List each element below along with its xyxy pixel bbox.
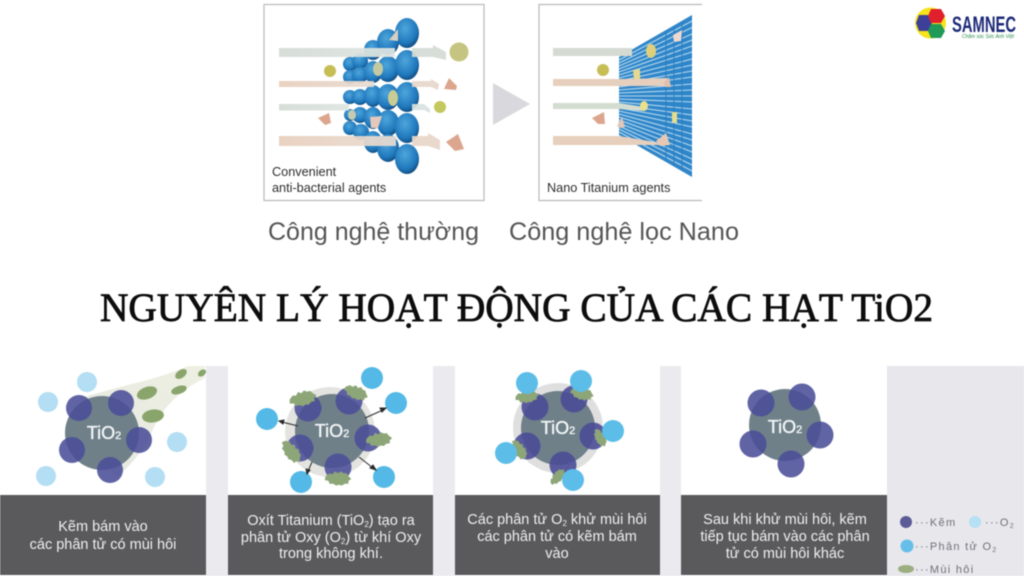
legend: zinc: ···Kẽm [915, 517, 956, 529]
step 2 caption: 2 [364, 520, 369, 529]
legend: O2 [969, 516, 1015, 530]
step 3 caption: 2 [562, 519, 567, 528]
O2 molecules [495, 370, 624, 491]
trapped particles [592, 30, 682, 146]
legend: O2 molecule: ···Phân tử O [915, 541, 992, 553]
panel: step 4: TiO2 [768, 417, 802, 437]
arrows through spheres [279, 45, 446, 150]
legend: zinc [900, 516, 956, 529]
odor plume [80, 366, 205, 478]
arrow between diagrams [493, 83, 530, 125]
step 3 caption [455, 495, 660, 575]
step 4 caption: tiếp tục bám vào các phân [700, 529, 870, 545]
odor particles [508, 385, 610, 488]
legend: O2 molecule: 2 [992, 547, 998, 554]
blocked particles among spheres [348, 29, 398, 128]
zinc particles [514, 386, 606, 478]
step 2 caption: phân tử Oxy (O [241, 530, 341, 546]
step 1 caption: các phân tử có mùi hôi [30, 537, 176, 553]
step 2 caption [228, 495, 433, 575]
filtered bands [553, 48, 667, 145]
step 1 caption: Kẽm bám vào [58, 519, 148, 535]
zinc particles [59, 390, 152, 483]
O2 particles [36, 372, 187, 487]
zinc particles [740, 384, 834, 478]
label: anti-bacterial agents [272, 181, 386, 195]
particles [318, 42, 468, 151]
title: NGUYÊN LÝ HOẠT ĐỘNG CỦA CÁC HẠT TiO2 [100, 285, 933, 330]
panel: step 3 [495, 370, 624, 491]
legend: O2: 2 [1010, 523, 1015, 530]
label: Convenient [272, 165, 337, 179]
legend: O2 molecule [900, 540, 998, 554]
legend: O2: ···O [985, 517, 1010, 529]
step 2 caption: 2 [341, 537, 346, 546]
panel: step 2: TiO2 [315, 421, 349, 441]
panel: legend column [887, 366, 1024, 576]
zinc particles [286, 388, 382, 480]
step 3 caption: vào [545, 546, 569, 562]
odor particles [277, 382, 393, 486]
caption: nano filter technology: Công nghệ lọc Nano [509, 218, 739, 246]
step 3 caption: Các phân tử O [467, 512, 562, 528]
step 2 caption: ) tạo ra [369, 513, 416, 529]
step 3 caption: các phân tử có kẽm bám [477, 529, 637, 545]
step 2 caption: trong không khí. [279, 546, 383, 562]
step 3 caption: khử mùi hôi [567, 512, 647, 528]
step 2 caption: ) từ khí Oxy [345, 530, 422, 546]
logo: SAMNEC: Chăm sóc Sức Anh Việt [962, 34, 1015, 40]
step 2 caption: Oxít Titanium (TiO [247, 513, 364, 529]
background dividers [206, 366, 681, 576]
panel: step 4 [740, 384, 834, 478]
O2 molecules [256, 367, 407, 493]
panel: conventional agents diagram [264, 4, 484, 200]
step 4 caption: tử có mùi hôi khác [726, 546, 844, 562]
label: Nano Titanium agents [547, 181, 670, 195]
emission arrows [279, 408, 386, 474]
panel: step 2 [256, 367, 407, 493]
legend: odor: ···Mùi hôi [915, 564, 974, 576]
panel: step 3: TiO2 [541, 418, 575, 438]
step 1 caption [0, 495, 206, 575]
TiO2 core [65, 396, 139, 470]
label [272, 165, 386, 195]
panel: step 1 [36, 366, 207, 487]
logo: SAMNEC [915, 8, 1016, 40]
step 4 caption: Sau khi khử mùi hôi, kẽm [703, 512, 867, 528]
blue agent spheres [343, 18, 419, 174]
panel: nano titanium agents diagram [539, 4, 702, 200]
step 4 caption [681, 495, 887, 575]
blue nano mesh [619, 15, 692, 177]
panel: step 1: TiO2 [87, 423, 121, 443]
caption: conventional technology: Công nghệ thường [268, 218, 479, 246]
odor particles [135, 367, 207, 424]
